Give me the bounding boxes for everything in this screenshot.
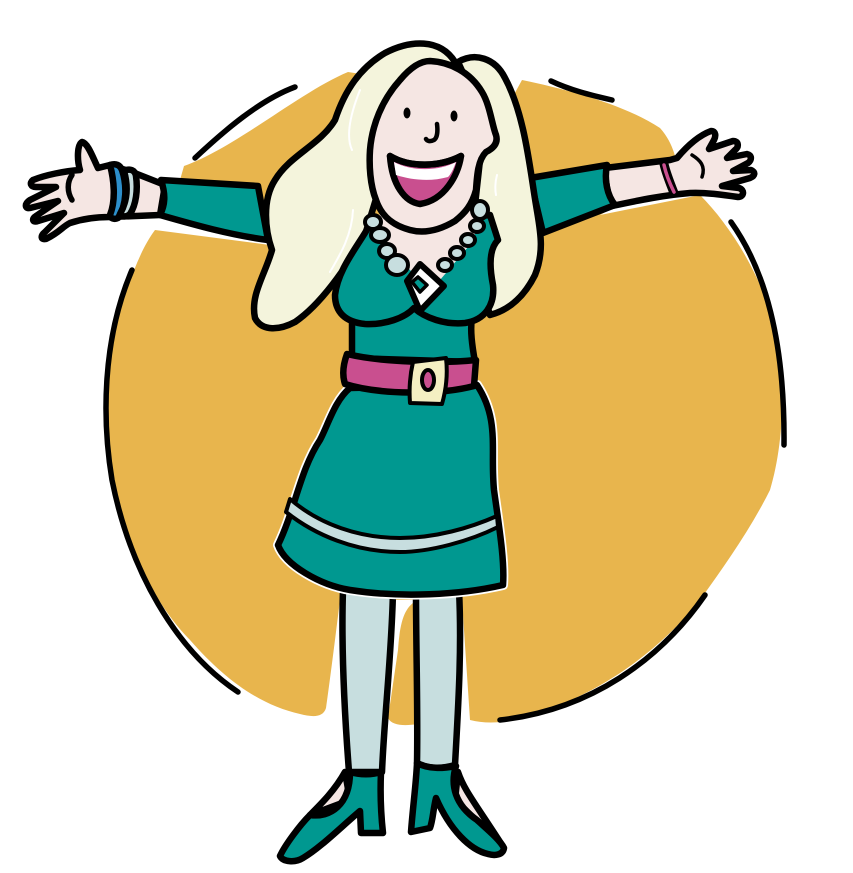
left hand: [26, 142, 165, 239]
background strokes: sketchy circle outline: [106, 81, 784, 720]
dress skirt: [278, 385, 503, 595]
right forearm and hand: [605, 131, 754, 206]
shoes: [280, 763, 504, 861]
belt: [343, 354, 476, 393]
face: [370, 61, 497, 232]
nose: [426, 124, 437, 141]
dress waist: [352, 308, 475, 362]
neck and chest: [372, 195, 478, 280]
eye left: [404, 108, 410, 118]
skirt halo: [278, 385, 503, 595]
right shoe: [455, 772, 502, 845]
left shoe: [310, 772, 350, 815]
teeth: [394, 162, 456, 180]
background: mustard circle: [107, 72, 782, 725]
pendant: [407, 264, 444, 311]
necklace: [365, 201, 488, 311]
right arm: [530, 131, 754, 233]
mouth: [390, 156, 461, 204]
belt buckle: [410, 358, 447, 404]
hair right lobe: [458, 57, 541, 315]
right leg: [416, 590, 460, 768]
left arm: [26, 142, 268, 240]
hair highlights: [330, 90, 497, 272]
dress bodice: [335, 215, 498, 324]
right bracelet: [664, 164, 674, 193]
skirt stripe: [286, 499, 498, 552]
right sleeve: [530, 165, 615, 233]
left sleeve: [160, 180, 268, 240]
left leg: [342, 590, 393, 772]
hair left lobe: [254, 43, 455, 328]
left bracelets: [110, 164, 125, 219]
legs: [342, 590, 460, 772]
eye right: [450, 110, 458, 122]
